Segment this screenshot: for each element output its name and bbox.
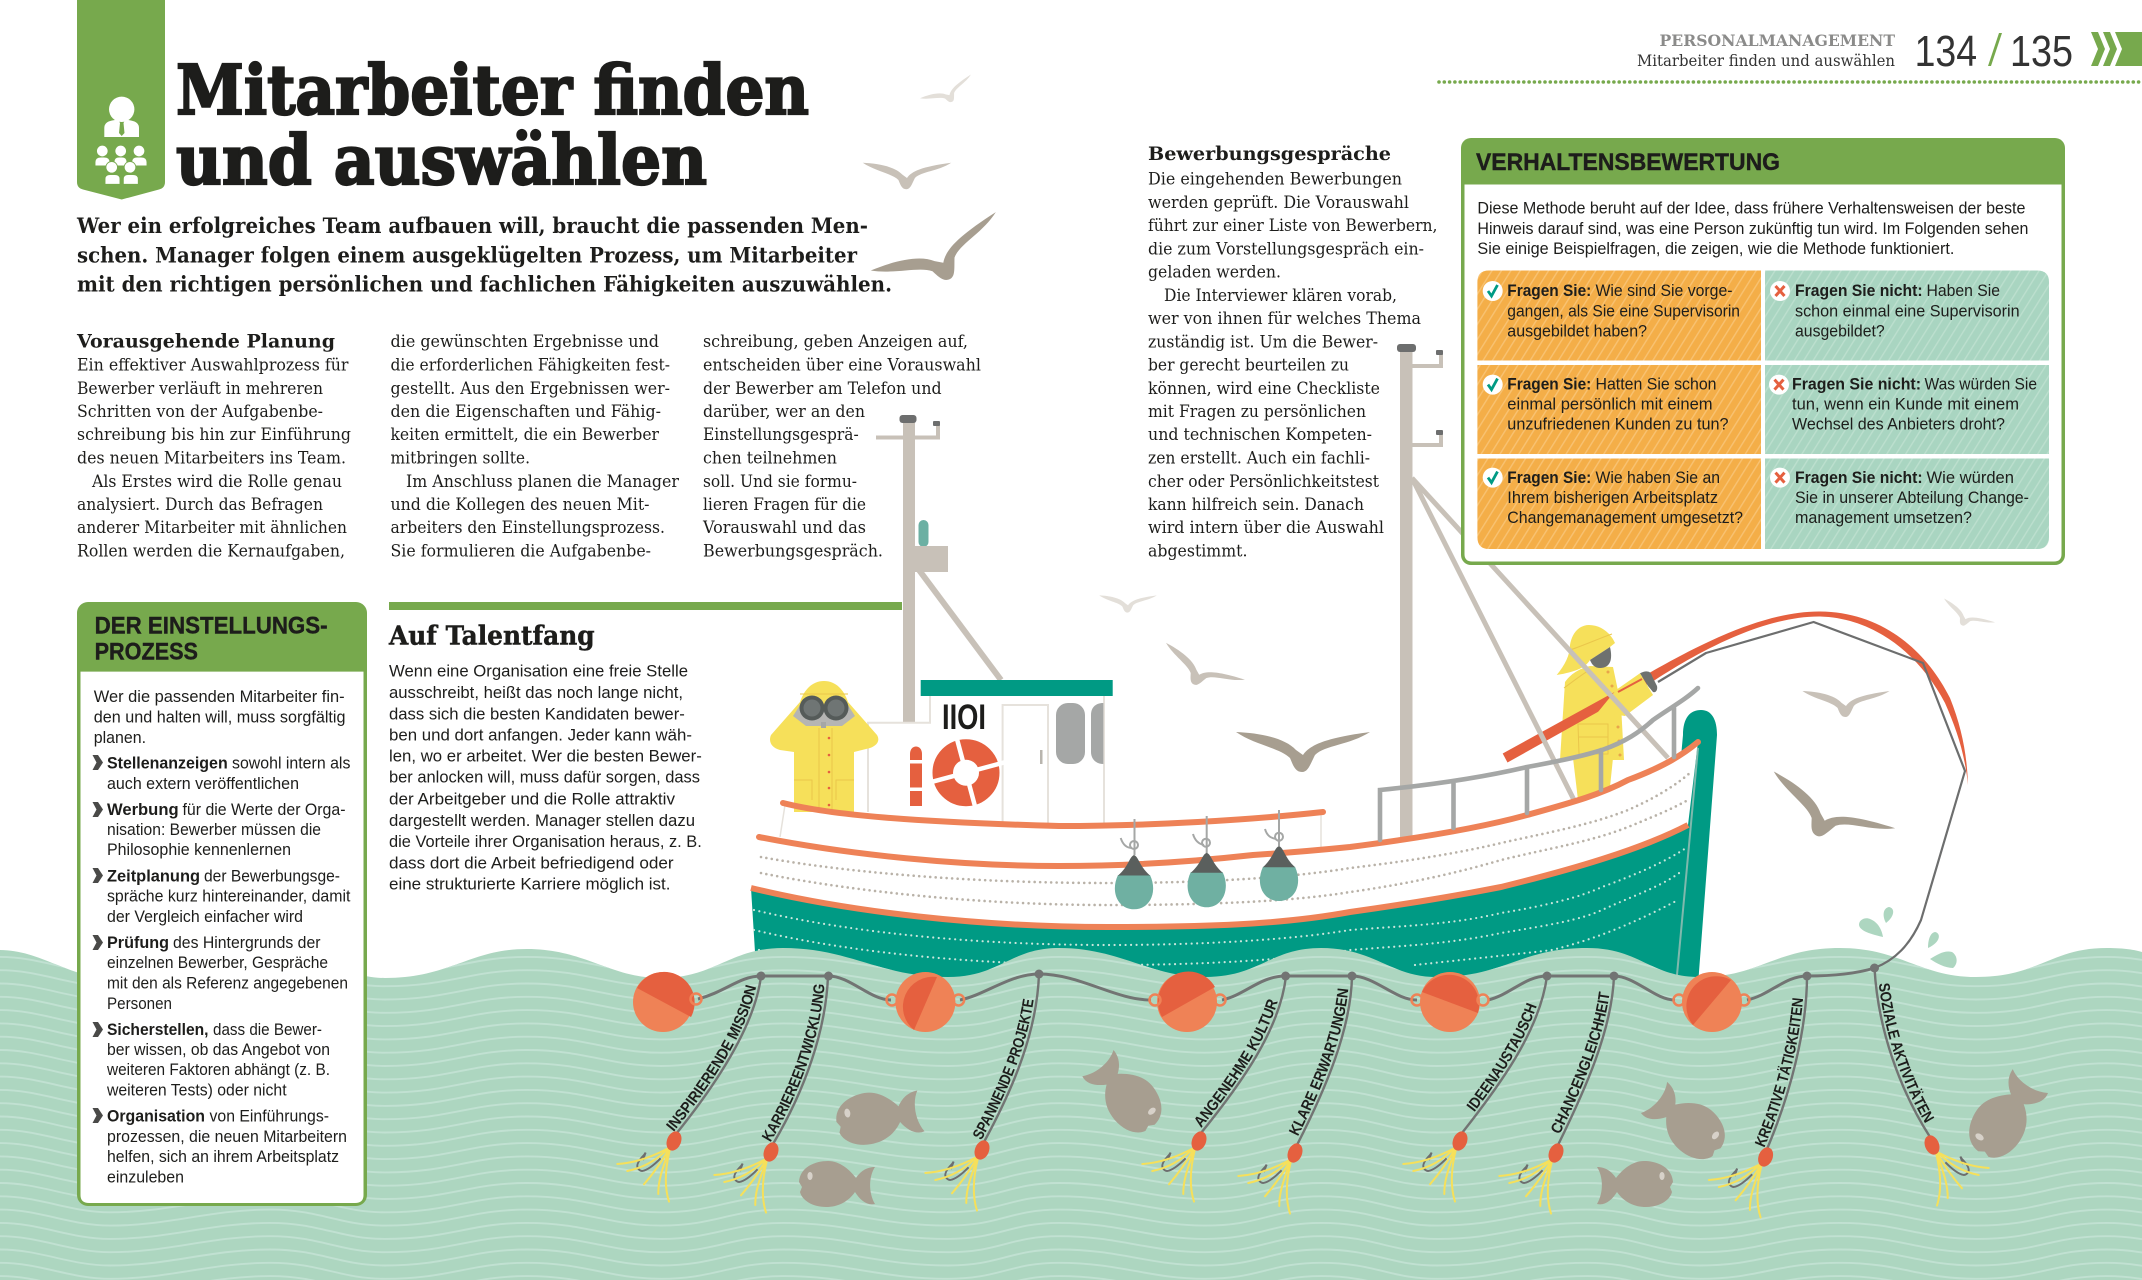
table text: management umsetzen? xyxy=(1795,509,1972,527)
table text: unzufriedenen Kunden zu tun? xyxy=(1507,415,1729,433)
list items: einzelnen Bewerber, Gespräche xyxy=(107,954,328,972)
section: Auf Talentfang: dass dort die Arbeit befriedigend oder xyxy=(389,853,674,872)
section: Auf Talentfang: eine strukturierte Karriere möglich ist. xyxy=(389,875,670,894)
illustration: masts and rigging xyxy=(876,344,1443,838)
text block: column 2: Im Anschluss planen die Manager xyxy=(406,472,680,492)
intro text xyxy=(76,213,892,297)
text block: Bewerbungsgespräche: mit Fragen zu persönlichen xyxy=(1148,402,1366,422)
text block: column 2: den die Eigenschaften und Fähig- xyxy=(390,402,661,422)
illustration: fisherman sleeve and glove xyxy=(1598,671,1657,716)
panel: Der Einstellungsprozess: DER EINSTELLUNGS- xyxy=(95,613,328,640)
illustration: bow railing xyxy=(1380,688,1698,840)
table text: Wie haben Sie an xyxy=(1596,469,1720,487)
table text xyxy=(1507,282,2037,527)
icon: chevrons xyxy=(2091,32,2142,66)
table text: Changemanagement umgesetzt? xyxy=(1507,509,1743,527)
panel: Verhaltensbewertung: VERHALTENSBEWERTUNG xyxy=(1476,149,1780,176)
text block: Bewerbungsgespräche: können, wird eine Checkliste xyxy=(1148,379,1380,399)
list items: sowohl intern als xyxy=(232,754,350,772)
illustration: lines with lures and value labels: KREATIVE TÄTIGKEITEN xyxy=(1754,998,1803,1148)
illustration: lines with lures and value labels xyxy=(616,964,1990,1219)
list items: helfen, sich an ihrem Arbeitsplatz xyxy=(107,1148,339,1166)
text block: column 2: und die Kollegen des neuen Mit- xyxy=(390,495,650,515)
illustration: sky birds xyxy=(863,74,1995,864)
list items: prozessen, die neuen Mitarbeitern xyxy=(107,1128,347,1146)
text block: column 2 xyxy=(390,332,680,562)
text block: column 3: Bewerbungsgespräch. xyxy=(703,542,883,562)
text block: column 3: entscheiden über eine Vorauswahl xyxy=(703,356,981,376)
text block: Bewerbungsgespräche: geladen werden. xyxy=(1148,262,1281,282)
text block: Bewerbungsgespräche: die zum Vorstellungsgespräch ein- xyxy=(1148,240,1424,260)
list items: spräche kurz hintereinander, damit xyxy=(107,887,351,905)
list items: von Einführungs- xyxy=(210,1107,329,1125)
list items: Zeitplanung xyxy=(107,867,200,885)
illustration: water splash drops xyxy=(1859,907,1957,968)
section: Auf Talentfang: Wenn eine Organisation eine freie Stelle xyxy=(389,662,688,680)
text block: Bewerbungsgespräche: kann hilfreich sein. Danach xyxy=(1148,495,1364,515)
icon: extinguisher marker xyxy=(909,746,923,806)
text block: Bewerbungsgespräche: zuständig ist. Um die Bewer- xyxy=(1148,332,1378,352)
intro text: mit den richtigen persönlichen und fachlichen Fähigkeiten auszuwählen. xyxy=(77,272,892,297)
text block: column 2: arbeiters den Einstellungsprozess. xyxy=(390,518,665,538)
list items: Prüfung xyxy=(107,934,169,952)
text block: column 3: lieren Fragen für die xyxy=(703,495,866,515)
list items: weiteren Faktoren abhängt (z. B. xyxy=(106,1061,330,1079)
text block: Vorausgehende Planung, column 1: Ein effektiver Auswahlprozess für xyxy=(77,356,349,376)
boat number: IIOI xyxy=(942,698,986,737)
illustration: lines with lures and value labels: SPANNENDE PROJEKTE xyxy=(973,998,1034,1140)
list items: weiteren Tests) oder nicht xyxy=(106,1082,287,1100)
illustration: fish xyxy=(799,1046,2051,1207)
text block: column 3: Einstellungsgesprä- xyxy=(703,425,859,445)
text block: Vorausgehende Planung, column 1: Als Erstes wird die Rolle genau xyxy=(91,472,342,492)
illustration: fisherman in yellow raincoat xyxy=(1557,625,1624,800)
illustration: lookout in yellow raincoat with binoculars xyxy=(770,681,878,812)
text block: Bewerbungsgespräche: abgestimmt. xyxy=(1148,542,1248,562)
text block: Vorausgehende Planung, column 1: anderer Mitarbeiter mit ähnlichen xyxy=(77,518,347,538)
illustration: cabin xyxy=(868,680,1113,825)
table text: Was würden Sie xyxy=(1924,376,2037,394)
section: Auf Talentfang: dargestellt werden. Manager stellen dazu xyxy=(389,811,695,830)
table text: Wie würden xyxy=(1926,469,2014,487)
icons: cross marks xyxy=(1769,281,1790,488)
text block: column 2: gestellt. Aus den Ergebnissen wer- xyxy=(390,379,670,399)
text block: Bewerbungsgespräche: ber gerecht beurteilen zu xyxy=(1148,356,1349,376)
illustration: lines with lures and value labels: INSPIRIERENDE MISSION xyxy=(666,984,756,1132)
table cells xyxy=(1477,270,2049,549)
illustration: lines with lures and value labels: ANGENEHME KULTUR xyxy=(1195,999,1278,1128)
table text: Fragen Sie nicht: xyxy=(1792,376,1921,394)
table text: Ihrem bisherigen Arbeitsplatz xyxy=(1507,489,1718,507)
list items: nisation: Bewerber müssen die xyxy=(107,821,321,839)
section: Auf Talentfang: len, wo er arbeitet. Wer die besten Bewer- xyxy=(389,746,702,765)
text block: Bewerbungsgespräche: werden geprüft. Die Vorauswahl xyxy=(1148,193,1409,213)
section: Auf Talentfang: ben und dort anfangen. Jeder kann wäh- xyxy=(389,726,692,745)
title: und auswählen xyxy=(176,121,707,201)
table text: Fragen Sie: xyxy=(1507,282,1591,300)
page header: PERSONALMANAGEMENT xyxy=(1660,31,1895,50)
panel: Der Einstellungsprozess: Wer die passenden Mitarbeiter fin- xyxy=(94,688,345,706)
table text: Wie sind Sie vorge- xyxy=(1596,282,1732,300)
text block: column 3: chen teilnehmen xyxy=(703,448,837,468)
list items: mit den als Referenz angegebenen xyxy=(107,974,348,992)
table text: schon einmal eine Supervisorin xyxy=(1795,302,2020,320)
text block: Bewerbungsgespräche: wird intern über die Auswahl xyxy=(1148,518,1384,538)
page header xyxy=(1439,27,2142,82)
list items: Philosophie kennenlernen xyxy=(107,841,291,859)
panel: Verhaltensbewertung: Sie einige Beispielfragen, die zeigen, wie die Methode funktioniert. xyxy=(1477,240,1954,258)
illustration: line from rod to net xyxy=(1658,622,1965,968)
table text: einmal persönlich mit einem xyxy=(1507,396,1713,414)
section: Auf Talentfang: Auf Talentfang xyxy=(388,621,595,651)
table text: tun, wenn ein Kunde mit einem xyxy=(1792,396,2019,414)
table text: Fragen Sie: xyxy=(1507,469,1591,487)
text block: column 2: Sie formulieren die Aufgabenbe- xyxy=(390,542,651,562)
table text: Hatten Sie schon xyxy=(1596,376,1716,394)
text block: column 3: schreibung, geben Anzeigen auf, xyxy=(703,332,968,352)
panel: Verhaltensbewertung xyxy=(1461,138,2065,565)
table text: Wechsel des Anbieters droht? xyxy=(1792,415,2005,433)
list items: Sicherstellen, xyxy=(107,1021,208,1039)
text block: column 3: darüber, wer an den xyxy=(703,402,865,422)
list items: Werbung xyxy=(107,801,179,819)
panel: Der Einstellungsprozess: den und halten will, muss sorgfältig xyxy=(94,709,346,727)
table text: Sie in unserer Abteilung Change- xyxy=(1795,489,2029,507)
list items xyxy=(106,754,351,1187)
panel: Der Einstellungsprozess: planen. xyxy=(94,729,146,747)
table text: Haben Sie xyxy=(1926,282,2000,300)
text block: Bewerbungsgespräche: zen erstellt. Auch ein fachli- xyxy=(1148,448,1370,468)
panel: Der Einstellungsprozess: PROZESS xyxy=(95,638,198,665)
text block: Vorausgehende Planung, column 1: Vorausgehende Planung xyxy=(76,330,335,352)
text block: Bewerbungsgespräche: wer von ihnen für welches Thema xyxy=(1148,309,1421,329)
panel: Verhaltensbewertung: Diese Methode beruht auf der Idee, dass frühere Verhaltensweisen der beste xyxy=(1477,200,2025,218)
section: Auf Talentfang: dass sich die besten Kandidaten bewer- xyxy=(389,704,685,723)
text block: Vorausgehende Planung, column 1: Schritten von der Aufgabenbe- xyxy=(77,402,323,422)
text block: Vorausgehende Planung, column 1 xyxy=(76,330,351,562)
text block: Bewerbungsgespräche: führt zur einer Liste von Bewerbern, xyxy=(1148,216,1438,236)
text block: Vorausgehende Planung, column 1: schreibung bis hin zur Einführung xyxy=(77,425,351,445)
section: Auf Talentfang: ausschreibt, heißt das noch lange nicht, xyxy=(389,683,683,702)
text block: Bewerbungsgespräche: Bewerbungsgespräche xyxy=(1148,143,1391,165)
table text: Fragen Sie nicht: xyxy=(1795,282,1923,300)
text block: Vorausgehende Planung, column 1: des neuen Mitarbeiters ins Team. xyxy=(77,448,346,468)
list items: der Bewerbungsge- xyxy=(204,867,340,885)
page header: Mitarbeiter finden und auswählen xyxy=(1637,52,1895,70)
text block: column 2: die erforderlichen Fähigkeiten fest- xyxy=(390,356,670,376)
section: Auf Talentfang: die Vorteile ihrer Organisation heraus, z. B. xyxy=(389,832,702,851)
text block: Bewerbungsgespräche: Die eingehenden Bewerbungen xyxy=(1148,170,1402,190)
text block: Bewerbungsgespräche xyxy=(1148,143,1438,562)
illustration: lines with lures and value labels: CHANCENGLEICHHEIT xyxy=(1552,991,1610,1133)
text block: column 3: soll. Und sie formu- xyxy=(703,472,857,492)
list items: für die Werte der Orga- xyxy=(182,801,346,819)
text block: Bewerbungsgespräche: cher oder Persönlichkeitstest xyxy=(1148,472,1379,492)
illustration: sea with wave pattern xyxy=(0,948,2142,1280)
illustration: boat hull xyxy=(751,710,1717,1000)
text block: Bewerbungsgespräche: Die Interviewer klären vorab, xyxy=(1164,286,1397,306)
list items: Stellenanzeigen xyxy=(107,754,228,772)
text block: Vorausgehende Planung, column 1: Rollen werden die Kernaufgaben, xyxy=(77,542,345,562)
illustration: fishing rod xyxy=(1503,611,1968,785)
icons: list chevrons xyxy=(92,755,103,1123)
table text: Fragen Sie nicht: xyxy=(1795,469,1923,487)
text block: column 3: Vorauswahl und das xyxy=(702,518,866,538)
list items: ber wissen, ob das Angebot von xyxy=(107,1041,330,1059)
list items: Organisation xyxy=(107,1107,205,1125)
page header: 134 xyxy=(1915,27,1977,76)
text block: Vorausgehende Planung, column 1: analysiert. Durch das Befragen xyxy=(77,495,323,515)
page header: 135 xyxy=(2010,27,2073,76)
intro text: schen. Manager folgen einem ausgeklügelten Prozess, um Mitarbeiter xyxy=(77,242,858,268)
icon: green ribbon with manager and team xyxy=(77,0,165,200)
list items: auch extern veröffentlichen xyxy=(107,775,299,793)
text block: column 3 xyxy=(702,332,981,562)
text block: column 2: mitbringen sollte. xyxy=(390,448,530,468)
text block: Bewerbungsgespräche: und technischen Kompeten- xyxy=(1148,425,1372,445)
illustration: float buoys xyxy=(633,972,1750,1032)
section: Auf Talentfang xyxy=(388,602,902,894)
table text: Fragen Sie: xyxy=(1507,376,1591,394)
illustration: lines with lures and value labels: IDEENAUSTAUSCH xyxy=(1466,1002,1537,1112)
table text: gangen, als Sie eine Supervisorin xyxy=(1507,302,1740,320)
table text: ausgebildet haben? xyxy=(1507,322,1647,340)
title: Mitarbeiter finden xyxy=(176,51,809,131)
illustration: net rope xyxy=(698,968,1874,1000)
list items: der Vergleich einfacher wird xyxy=(107,908,303,926)
icon: lifebuoy xyxy=(917,723,1015,822)
panel: Der Einstellungsprozess xyxy=(77,602,367,1206)
table text: ausgebildet? xyxy=(1795,322,1885,340)
intro text: Wer ein erfolgreiches Team aufbauen will, braucht die passenden Men- xyxy=(76,213,868,238)
section: Auf Talentfang: ber anlocken will, muss dafür sorgen, dass xyxy=(389,768,700,787)
illustration: lines with lures and value labels: KARRIEREENTWICKLUNG xyxy=(762,984,824,1142)
text block: column 2: keiten ermittelt, die ein Bewerber xyxy=(390,425,660,445)
text block: column 3: der Bewerber am Telefon und xyxy=(703,379,942,399)
illustration: three fenders xyxy=(1115,810,1298,909)
list items: Personen xyxy=(107,995,172,1013)
title xyxy=(176,51,809,201)
list items: dass die Bewer- xyxy=(213,1021,322,1039)
illustration: lines with lures and value labels: SOZIALE AKTIVITÄTEN xyxy=(1879,984,1934,1123)
icons: check marks xyxy=(1483,281,1503,488)
panel: Verhaltensbewertung: Hinweis darauf sind, was eine Person zukünftig tun wird. Im Folgenden sehen xyxy=(1477,220,2028,238)
text block: Vorausgehende Planung, column 1: Bewerber verläuft in mehreren xyxy=(77,379,323,399)
list items: einzuleben xyxy=(107,1169,184,1187)
section: Auf Talentfang: der Arbeitgeber und die Rolle attraktiv xyxy=(389,789,675,808)
illustration: lines with lures and value labels: KLARE ERWARTUNGEN xyxy=(1288,988,1348,1136)
illustration: struts in front of fisherman xyxy=(1412,478,1668,802)
text block: column 2: die gewünschten Ergebnisse und xyxy=(390,332,659,352)
list items: des Hintergrunds der xyxy=(173,934,321,952)
